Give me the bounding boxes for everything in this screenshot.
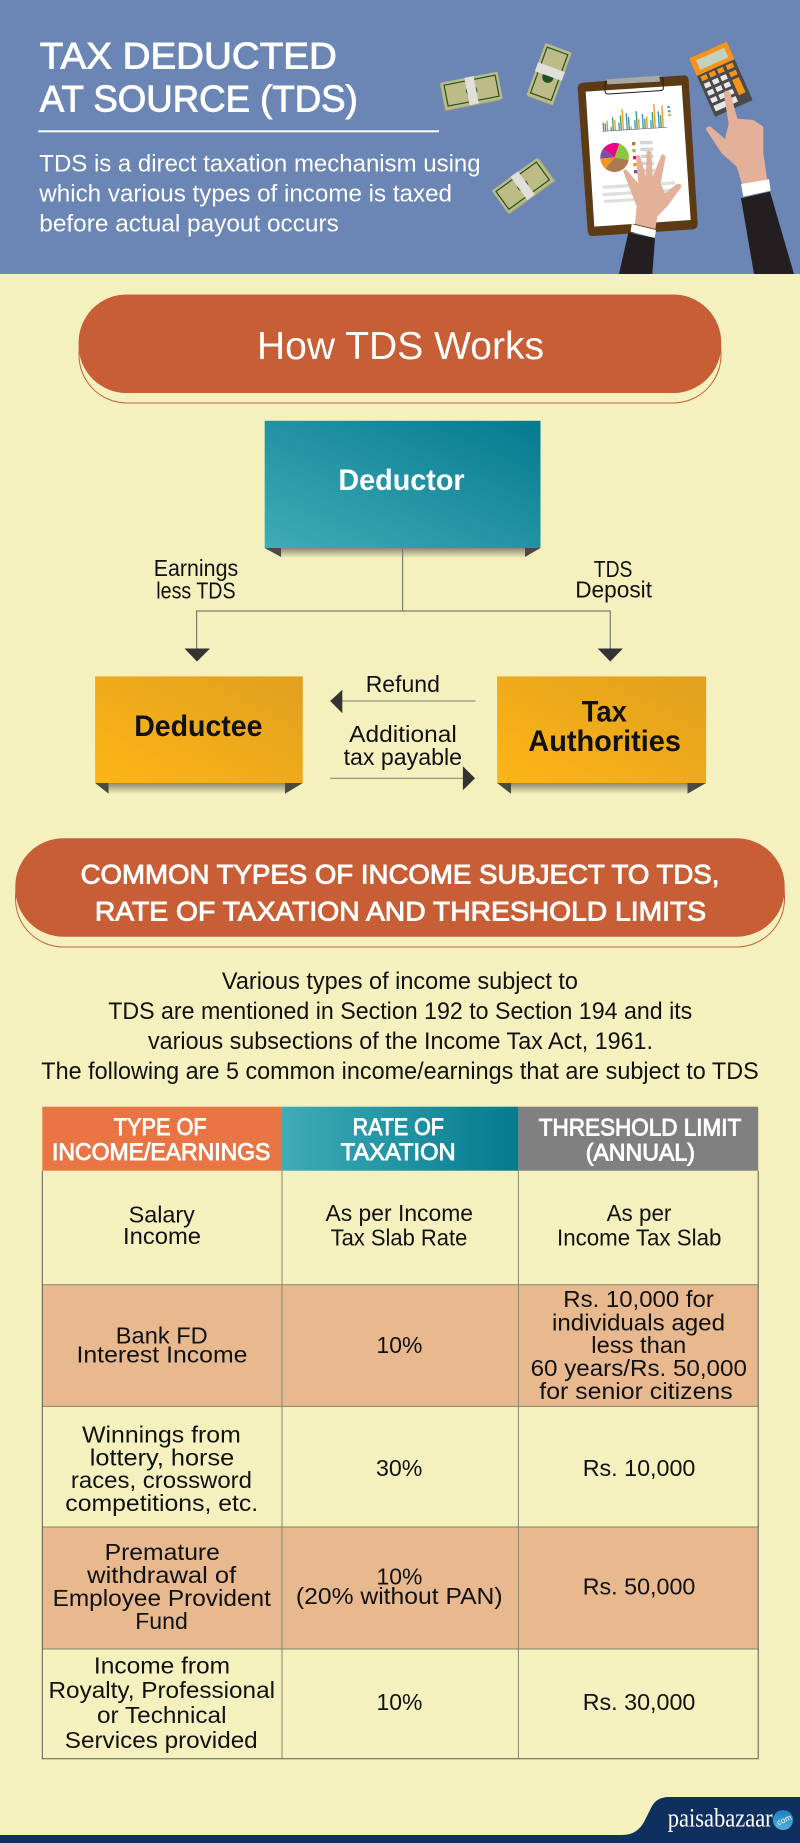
icon: money stack top <box>526 43 572 106</box>
footer: paisabazaar logo: paisabazaar <box>668 1804 773 1833</box>
label: TDS deposit: TDS <box>594 556 632 582</box>
arrowhead to deductee <box>184 648 210 662</box>
row: royalty and professional income: Services provided <box>65 1727 258 1753</box>
icon: calculator <box>689 42 753 117</box>
icon: .com badge: .com <box>773 1813 793 1828</box>
row: premature EPF withdrawal <box>53 1539 695 1634</box>
row: premature EPF withdrawal: Rs. 50,000 <box>583 1573 695 1599</box>
row: winnings: Winnings from <box>82 1421 241 1447</box>
row: royalty and professional income <box>48 1652 695 1753</box>
row: premature EPF withdrawal: Premature <box>105 1539 220 1565</box>
row: winnings: 30% <box>376 1455 422 1481</box>
arrowhead to tax authorities <box>598 648 623 662</box>
shaded rows <box>42 1285 758 1649</box>
table header row: INCOME/EARNINGS <box>52 1139 270 1166</box>
intro paragraph: various subsections of the Income Tax Act, 1961. <box>148 1028 653 1055</box>
box: deductor <box>265 421 540 558</box>
table header row: TAXATION <box>341 1139 456 1166</box>
intro text: before actual payout occurs <box>39 211 339 238</box>
box: tax authorities <box>497 676 706 794</box>
heading pill: common types of income: COMMON TYPES OF INCOME SUBJECT TO TDS, <box>81 859 719 889</box>
row: bank FD interest income: Rs. 10,000 for <box>563 1286 714 1312</box>
row: bank FD interest income <box>76 1286 747 1404</box>
flow diagram <box>95 421 706 794</box>
row: premature EPF withdrawal: Employee Provident <box>53 1585 271 1611</box>
illustration: money, clipboard, calculator and hands <box>439 42 794 274</box>
row: premature EPF withdrawal: 10% <box>376 1564 422 1590</box>
row: bank FD interest income: for senior citizens <box>539 1378 733 1404</box>
table header row: THRESHOLD LIMIT <box>539 1115 742 1142</box>
row: bank FD interest income: 60 years/Rs. 50,000 <box>531 1355 747 1381</box>
row: winnings: races, crossword <box>71 1467 252 1493</box>
connector lines <box>197 548 610 648</box>
row: salary income: As per <box>607 1200 672 1226</box>
row: bank FD interest income: Interest Income <box>76 1341 247 1367</box>
box: tax authorities: Tax <box>582 696 627 728</box>
box: deductor: Deductor <box>338 464 465 497</box>
row: winnings <box>65 1421 695 1516</box>
intro paragraph <box>41 968 759 1085</box>
table header row: (ANNUAL) <box>586 1140 695 1167</box>
intro paragraph: Various types of income subject to <box>222 968 578 995</box>
row: premature EPF withdrawal: (20% without PAN) <box>296 1583 503 1609</box>
row: salary income: As per Income <box>326 1200 473 1226</box>
row: royalty and professional income: or Technical <box>97 1702 226 1728</box>
label: additional tax payable: Additional <box>349 721 457 747</box>
row: salary income: Salary <box>129 1201 195 1227</box>
icon: clipboard <box>578 75 698 236</box>
table header row: TYPE OF <box>114 1114 207 1141</box>
heading pill: How TDS Works <box>79 294 721 403</box>
row: salary income: Income <box>123 1223 201 1249</box>
table: income types, rates and thresholds <box>42 1107 758 1759</box>
label: additional tax payable <box>344 721 462 770</box>
label: TDS deposit <box>575 556 653 602</box>
heading pill: common types of income: RATE OF TAXATION AND THRESHOLD LIMITS <box>95 897 706 927</box>
row: bank FD interest income: individuals aged <box>552 1309 725 1335</box>
title: AT SOURCE (TDS) <box>40 78 358 120</box>
table header row <box>42 1107 758 1171</box>
label: TDS deposit: Deposit <box>575 576 653 602</box>
row: bank FD interest income: 10% <box>376 1332 422 1358</box>
pie chart <box>600 143 629 172</box>
row: winnings: competitions, etc. <box>65 1490 258 1516</box>
icon: right hand with sleeve <box>706 91 794 274</box>
row: premature EPF withdrawal: withdrawal of <box>86 1562 237 1588</box>
row: premature EPF withdrawal: Fund <box>135 1608 188 1634</box>
row: royalty and professional income: Income from <box>94 1652 230 1678</box>
heading pill: common types of income <box>15 838 785 947</box>
title <box>40 34 358 120</box>
row: winnings: Rs. 10,000 <box>583 1455 695 1481</box>
panel: header banner <box>0 0 800 274</box>
row: royalty and professional income: Royalty, Professional <box>48 1677 275 1703</box>
heading pill: How TDS Works: How TDS Works <box>257 325 544 368</box>
footer: paisabazaar logo <box>0 1797 800 1843</box>
box: deductee <box>95 676 303 794</box>
title: TAX DEDUCTED <box>40 34 337 76</box>
box: tax authorities: Authorities <box>528 725 681 758</box>
label: refund: Refund <box>366 671 440 697</box>
label: additional tax payable: tax payable <box>344 744 462 770</box>
intro text: which various types of income is taxed <box>38 181 452 208</box>
icon: left hand with sleeve <box>619 151 681 274</box>
table outer border <box>42 1171 758 1759</box>
intro paragraph: TDS are mentioned in Section 192 to Section 194 and its <box>108 998 692 1025</box>
row: salary income: Tax Slab Rate <box>331 1225 467 1251</box>
row: royalty and professional income: Rs. 30,000 <box>583 1689 695 1715</box>
icon: money stack left <box>439 71 503 111</box>
label: earnings less TDS <box>154 555 238 604</box>
intro text <box>38 151 481 238</box>
intro text: TDS is a direct taxation mechanism using <box>39 151 481 178</box>
label: earnings less TDS: Earnings <box>154 555 238 581</box>
pie legend <box>632 141 655 173</box>
table header row: RATE OF <box>353 1114 444 1141</box>
table grid <box>42 1171 758 1759</box>
row: salary income: Income Tax Slab <box>557 1225 721 1251</box>
row: bank FD interest income: Bank FD <box>116 1322 208 1348</box>
icon: money stack bottom <box>492 157 555 215</box>
arrow: additional tax payable <box>330 766 475 790</box>
bar chart <box>601 103 667 132</box>
box: deductee: Deductee <box>134 710 262 743</box>
row: salary income <box>123 1200 721 1251</box>
arrow: refund <box>330 690 475 713</box>
row: winnings: lottery, horse <box>90 1444 234 1470</box>
row: bank FD interest income: less than <box>591 1332 686 1358</box>
intro paragraph: The following are 5 common income/earnings that are subject to TDS <box>41 1058 759 1085</box>
row: royalty and professional income: 10% <box>376 1689 422 1715</box>
label: earnings less TDS: less TDS <box>156 578 236 604</box>
